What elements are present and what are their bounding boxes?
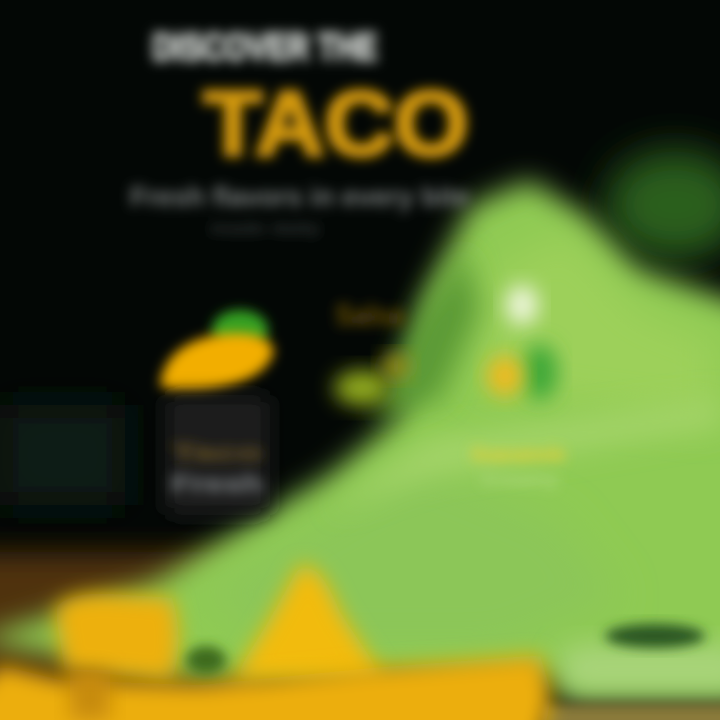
dark teal left panel — [0, 405, 125, 505]
bottom right table — [540, 704, 720, 720]
lower fold — [200, 460, 620, 650]
wooden table — [0, 552, 260, 720]
subtitle text: Fresh flavors in every bite — [130, 181, 470, 212]
hill label: Creamy — [482, 472, 558, 489]
heading: DISCOVER THE — [152, 27, 378, 69]
lower right green plate — [560, 645, 720, 693]
dark avocado spot — [605, 624, 705, 648]
shell — [160, 333, 274, 392]
icon: taco — [160, 310, 274, 392]
hill shadow — [375, 250, 480, 420]
card text: Fresh — [171, 471, 263, 498]
panel: dark card — [165, 395, 270, 515]
dark green leaf top right — [605, 150, 720, 260]
card heading: Taco — [172, 440, 262, 465]
label: middle: Salsa — [335, 299, 405, 332]
title: TACO: TACO — [204, 73, 468, 175]
fold crease — [330, 400, 720, 510]
hill label: Guacamole — [471, 444, 565, 466]
green guacamole hill — [0, 180, 720, 700]
hill highlight — [480, 230, 720, 420]
icon: green and yellow garnish — [334, 354, 410, 406]
subtitle text — [130, 181, 470, 236]
avocado piece — [186, 646, 226, 674]
icon: garnish on hill — [487, 285, 558, 400]
lettuce — [212, 310, 268, 350]
hill label — [471, 444, 565, 489]
yellow chips — [0, 565, 552, 720]
subtitle text: made daily — [210, 220, 320, 236]
